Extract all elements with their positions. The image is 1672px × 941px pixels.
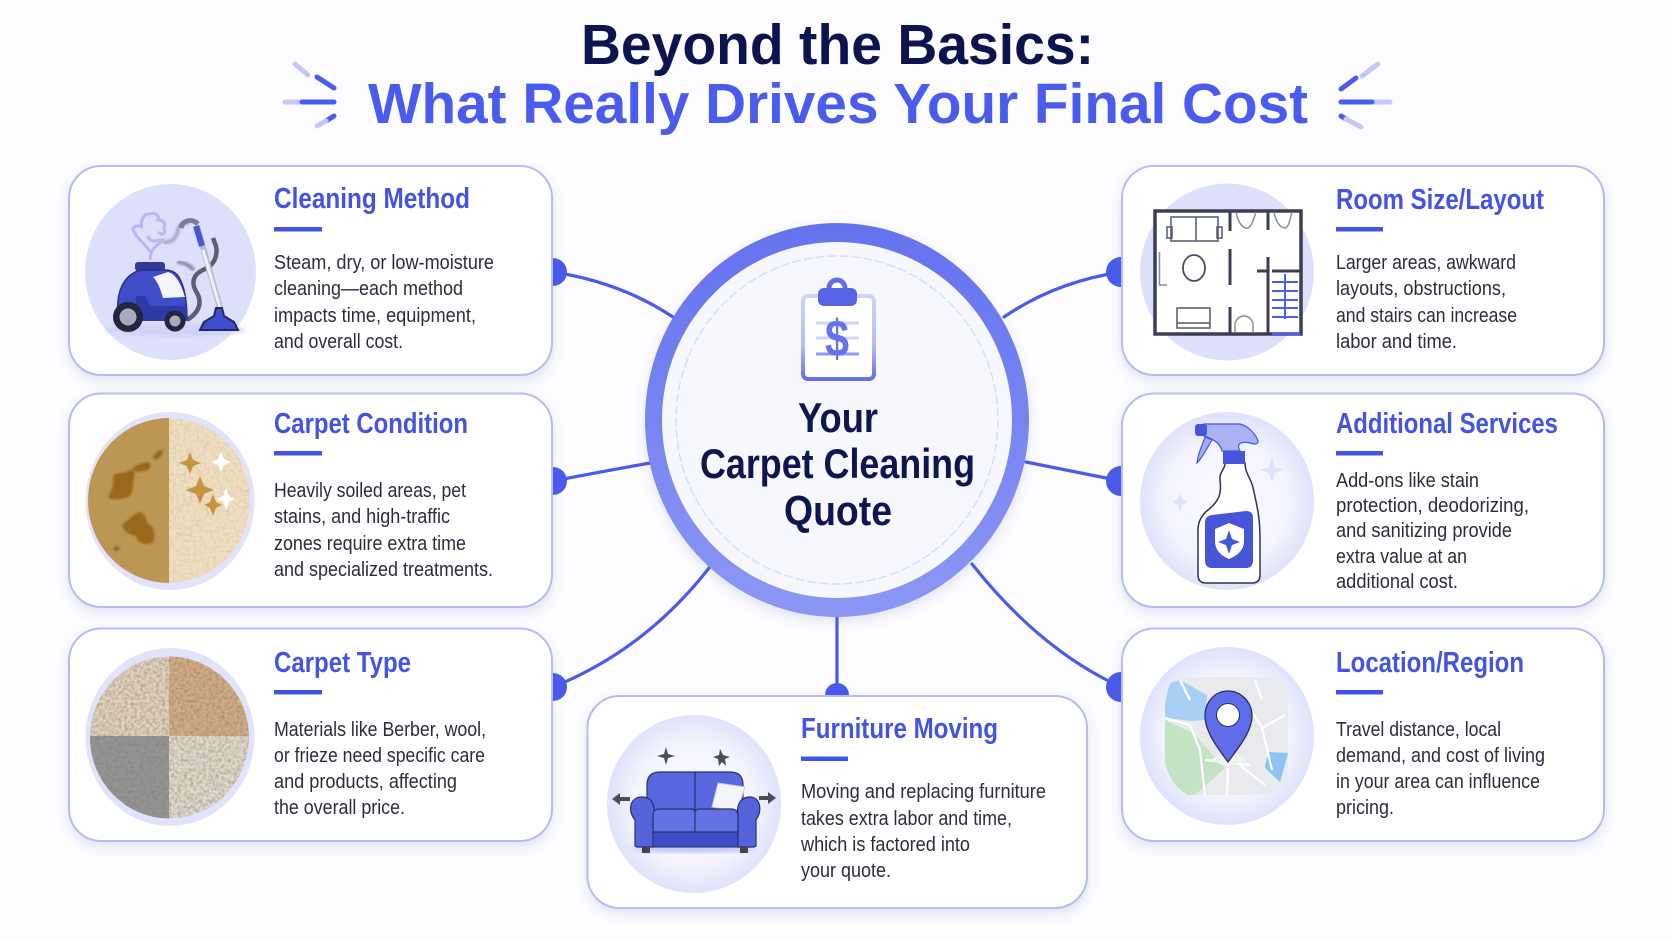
heading: Carpet Type — [274, 647, 411, 679]
body text: Travel distance, local — [1336, 719, 1501, 741]
body text: layouts, obstructions, — [1336, 278, 1506, 300]
hub label: Carpet Cleaning — [700, 440, 975, 487]
body text: additional cost. — [1336, 571, 1458, 593]
panel: room size and layout — [1122, 166, 1604, 375]
body text: Steam, dry, or low-moisture — [274, 252, 494, 274]
accent rule — [274, 451, 322, 456]
icon: right title accent — [1341, 64, 1390, 127]
body text: and sanitizing provide — [1336, 520, 1512, 542]
panel: furniture moving — [588, 696, 1087, 908]
icon: floor plan — [1140, 184, 1314, 360]
panel: carpet type — [69, 628, 552, 841]
hub inner disc — [662, 242, 1012, 598]
accent rule — [274, 227, 322, 232]
body text — [1336, 719, 1545, 819]
body text — [1336, 470, 1529, 593]
accent rule — [274, 690, 322, 694]
body text: Materials like Berber, wool, — [274, 719, 486, 741]
body text: and products, affecting — [274, 771, 457, 793]
body text: Moving and replacing furniture — [801, 781, 1046, 803]
body text: demand, and cost of living — [1336, 745, 1545, 767]
body text: takes extra labor and time, — [801, 808, 1012, 830]
connectors — [539, 257, 1136, 707]
body text: cleaning—each method — [274, 278, 463, 300]
accent rule — [1336, 451, 1383, 456]
hub label: Quote — [784, 487, 892, 534]
icon: soiled and clean carpet — [85, 412, 254, 590]
body text — [800, 781, 1046, 882]
heading: Room Size/Layout — [1336, 184, 1544, 216]
panel: additional services — [1122, 394, 1604, 607]
body text — [274, 480, 493, 581]
panel: location and region — [1122, 628, 1604, 841]
hub ring — [645, 223, 1029, 617]
body text: Heavily soiled areas, pet — [274, 480, 466, 502]
panel: cleaning method — [69, 166, 552, 375]
body text: or frieze need specific care — [274, 745, 485, 767]
heading: Furniture Moving — [801, 713, 998, 745]
title line 1: Beyond the Basics: — [581, 13, 1094, 77]
body text: in your area can influence — [1336, 771, 1540, 793]
hub label: Your — [798, 394, 878, 441]
hub dashed circle — [676, 256, 998, 584]
heading: Cleaning Method — [274, 183, 470, 215]
body text: Add-ons like stain — [1336, 470, 1479, 492]
icon: clipboard with dollar — [803, 280, 874, 379]
body text: pricing. — [1336, 797, 1394, 819]
heading: Carpet Condition — [274, 408, 468, 440]
icon: map pin — [1140, 647, 1314, 825]
body text: Larger areas, awkward — [1336, 252, 1516, 274]
heading: Additional Services — [1336, 408, 1558, 440]
title — [368, 13, 1308, 136]
icon: sofa — [607, 715, 781, 893]
accent rule — [1336, 227, 1383, 232]
panel: carpet condition — [69, 394, 552, 607]
body text — [274, 719, 486, 819]
body text: protection, deodorizing, — [1336, 495, 1529, 517]
body text: labor and time. — [1336, 331, 1457, 353]
body text — [274, 252, 494, 353]
body text: and overall cost. — [274, 331, 403, 353]
icon: carpet swatches — [86, 648, 254, 826]
body text: and specialized treatments. — [274, 559, 493, 581]
title line 2: What Really Drives Your Final Cost — [368, 72, 1308, 136]
body text: extra value at an — [1336, 546, 1467, 568]
icon: left title accent — [285, 64, 334, 126]
hub label — [700, 394, 975, 534]
icon: clipboard with dollar: $ — [825, 310, 849, 368]
body text: which is factored into — [800, 834, 970, 856]
body text: your quote. — [801, 860, 891, 882]
body text: impacts time, equipment, — [274, 305, 476, 327]
body text: stains, and high-traffic — [274, 506, 450, 528]
icon: carpet cleaning machine — [85, 184, 256, 360]
accent rule — [1336, 690, 1383, 694]
body text — [1336, 252, 1517, 353]
body text: zones require extra time — [274, 533, 466, 555]
body text: and stairs can increase — [1336, 305, 1517, 327]
heading: Location/Region — [1336, 647, 1524, 679]
body text: the overall price. — [274, 797, 405, 819]
accent rule — [801, 756, 848, 761]
central hub — [645, 223, 1029, 617]
icon: spray bottle — [1140, 412, 1314, 590]
